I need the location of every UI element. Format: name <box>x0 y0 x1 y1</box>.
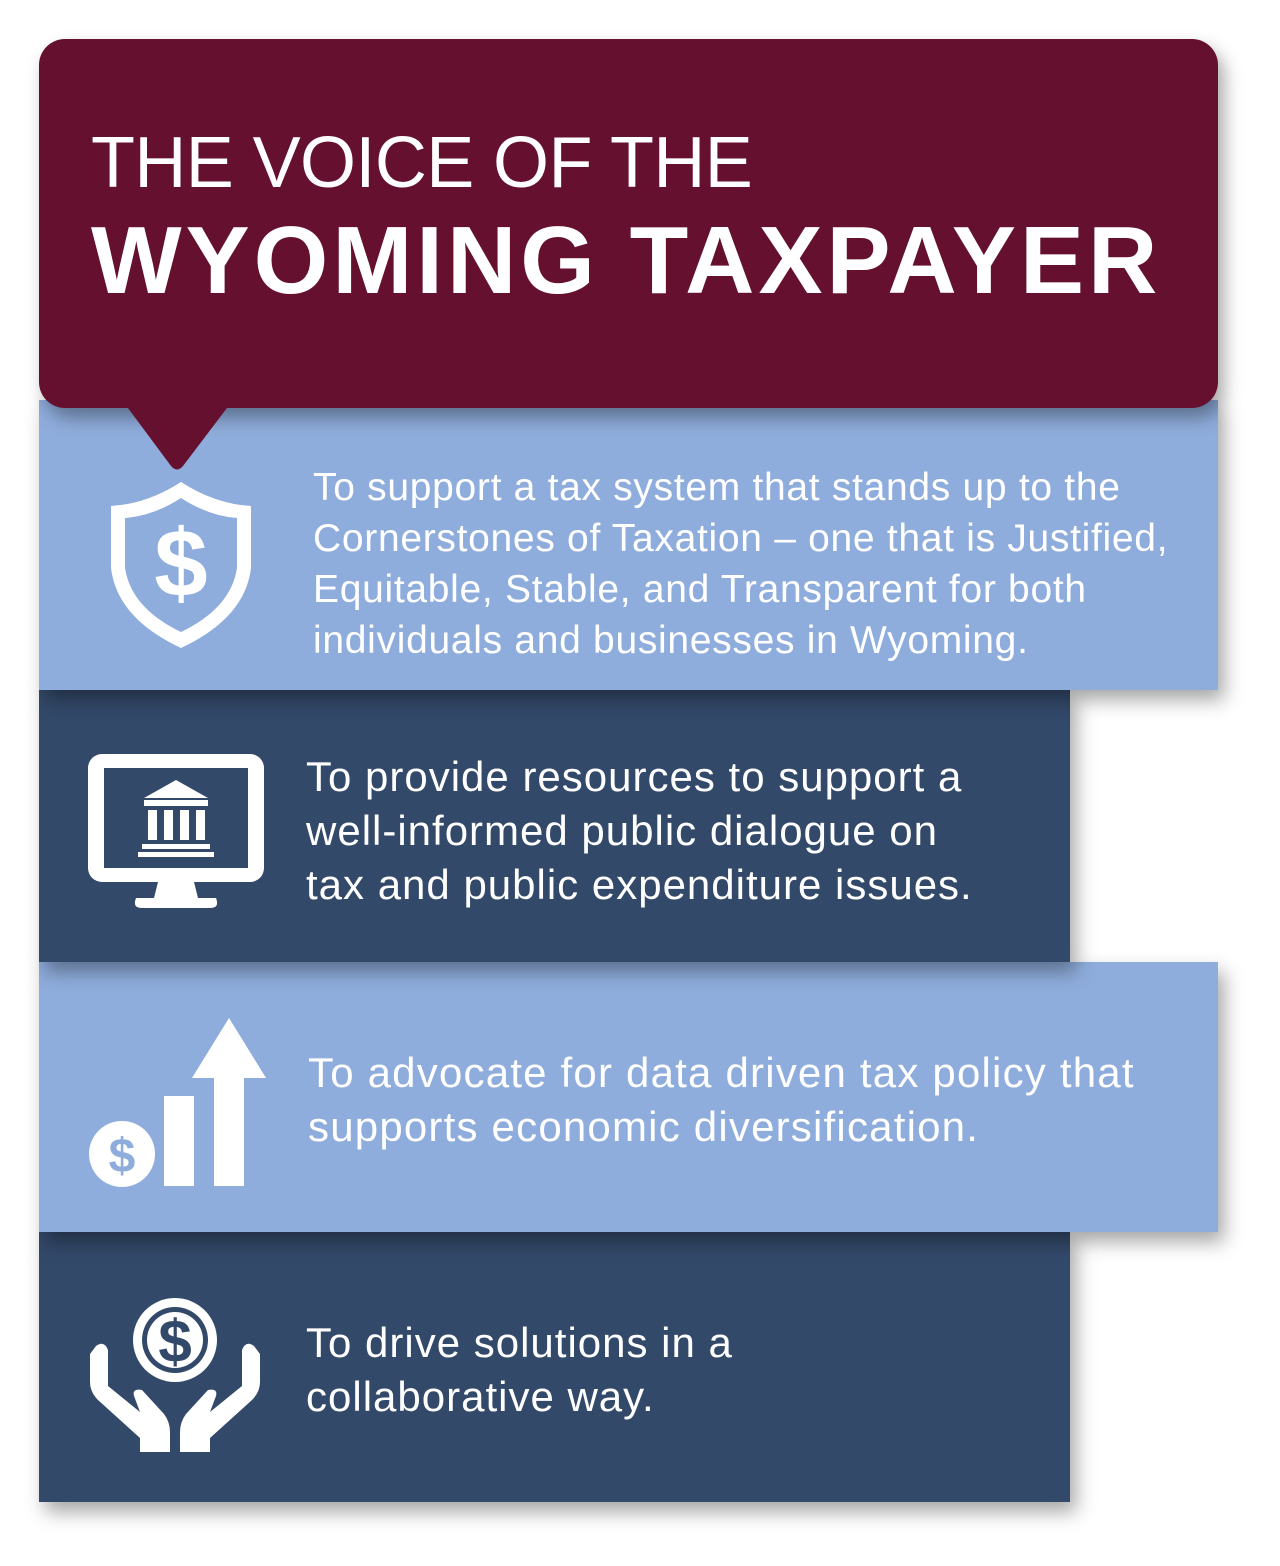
text 4 <box>306 1319 733 1420</box>
title <box>91 123 1161 314</box>
text 1: Cornerstones of Taxation – one that is Justified, <box>313 517 1168 560</box>
icon: shield dollar: $ <box>154 510 208 617</box>
header banner <box>39 39 1218 408</box>
text 1 <box>313 466 1168 662</box>
text 2: tax and public expenditure issues. <box>306 861 973 908</box>
icon: growth chart: $ <box>109 1130 136 1183</box>
text 4: collaborative way. <box>306 1373 655 1420</box>
icon: hands dollar: $ <box>158 1308 192 1375</box>
icon: shield dollar <box>111 482 251 648</box>
text 3 <box>308 1049 1135 1150</box>
panel: light 1 <box>39 400 1218 690</box>
icon: growth chart <box>89 1018 266 1187</box>
text 2 <box>306 753 973 908</box>
icon: hands dollar <box>90 1298 260 1452</box>
text 1: Equitable, Stable, and Transparent for both <box>313 568 1087 611</box>
text 1: individuals and businesses in Wyoming. <box>313 619 1029 662</box>
text 3: To advocate for data driven tax policy that <box>308 1049 1135 1096</box>
title: WYOMING TAXPAYER <box>91 207 1161 314</box>
text 4: To drive solutions in a <box>306 1319 733 1366</box>
text 2: well-informed public dialogue on <box>306 807 938 854</box>
panel: dark 4 <box>39 1232 1070 1502</box>
pointer <box>128 408 227 470</box>
text 1: To support a tax system that stands up to the <box>313 466 1121 509</box>
text 2: To provide resources to support a <box>306 753 962 800</box>
title: THE VOICE OF THE <box>91 123 752 203</box>
text 3: supports economic diversification. <box>308 1103 979 1150</box>
panel: light 3 <box>39 962 1218 1232</box>
icon: monitor bank <box>88 754 264 908</box>
panel: dark 2 <box>39 690 1070 962</box>
